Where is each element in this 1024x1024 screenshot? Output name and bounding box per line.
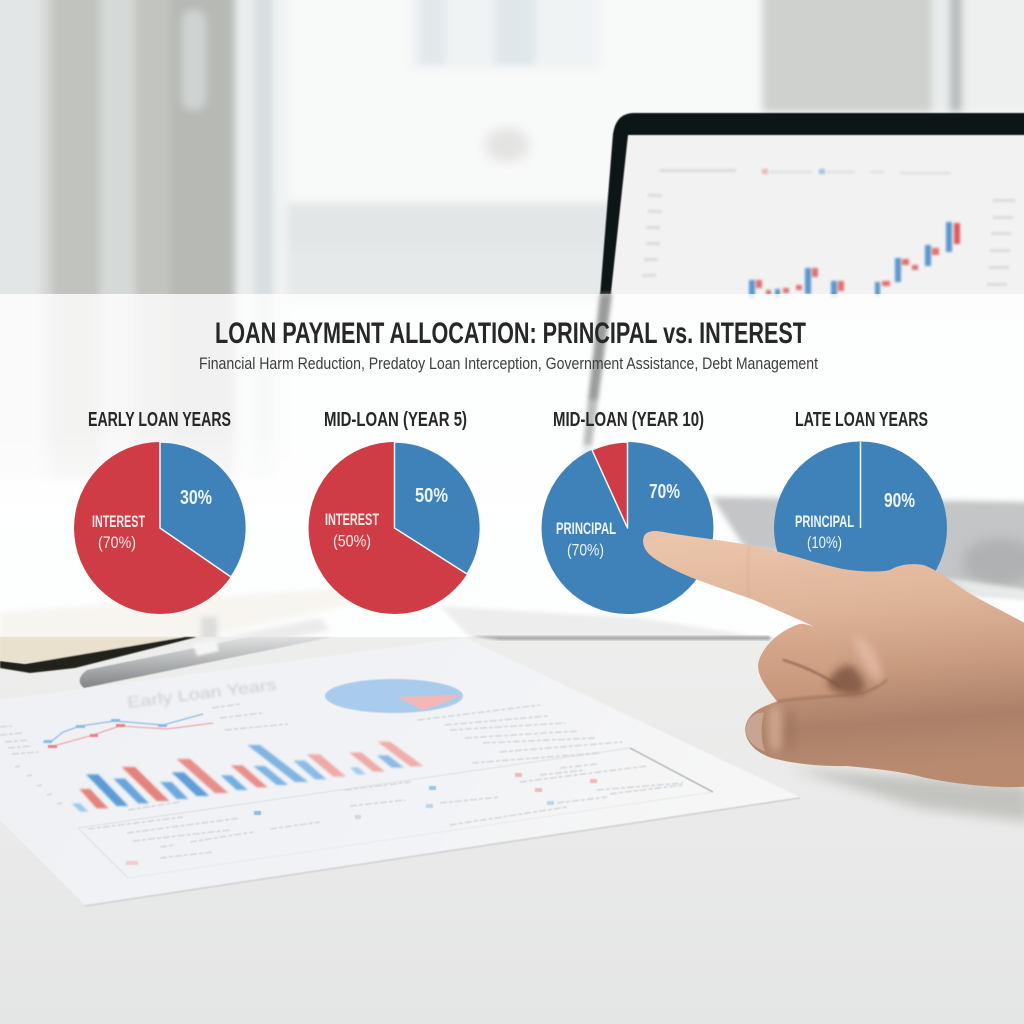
- label: principal 70%: [556, 520, 616, 560]
- desk surface: [0, 637, 1024, 1024]
- label: principal 70%: PRINCIPAL: [556, 520, 616, 538]
- thumb nail and highlight: [746, 704, 796, 752]
- pale palm edge: [853, 633, 881, 683]
- panel lower-area soft fade: [0, 430, 590, 530]
- notebook: [0, 637, 197, 673]
- photo background: [0, 0, 1024, 640]
- pie: mid-loan year 5: [308, 442, 480, 614]
- notebook behind panel: [0, 588, 350, 640]
- paper heading: Early Loan Years: [126, 677, 277, 712]
- paper bar chart: [72, 742, 423, 812]
- pie group: mid-loan year 10: [542, 409, 714, 614]
- label: principal 10%: [795, 513, 854, 552]
- paper sheet: [0, 638, 800, 905]
- label: interest 70%: INTEREST: [92, 513, 145, 531]
- heading: mid-loan year 5: MID-LOAN (YEAR 5): [324, 409, 467, 431]
- label: principal 70%: (70%): [567, 542, 604, 560]
- label: 90%: 90%: [884, 490, 915, 512]
- pie: early loan years: [74, 442, 246, 614]
- laptop base edge on desk: [470, 636, 770, 640]
- laptop screen candlestick chart: [749, 222, 960, 298]
- shadow between fingers: [827, 665, 865, 695]
- laptop keyboard seen through panel: [440, 497, 1024, 637]
- curled finger: [758, 624, 867, 702]
- laptop lid and screen: [600, 113, 1024, 296]
- label: interest 50%: [325, 511, 379, 550]
- label: interest 50%: INTEREST: [325, 511, 379, 529]
- pie: late loan years: [774, 442, 947, 614]
- laptop screen legend and axes: [642, 169, 1015, 286]
- paper small text lines: [0, 704, 683, 858]
- paper report: [0, 638, 800, 906]
- laptop bezel seen through panel: [580, 294, 612, 490]
- translucent white panel: [0, 294, 1024, 637]
- pie: mid-loan year 10: [542, 442, 714, 614]
- pointing hand: [643, 531, 1024, 787]
- paper table frame: [78, 748, 713, 878]
- label: 50%: 50%: [415, 485, 448, 507]
- laptop: [600, 113, 1024, 320]
- heading: late loan years: LATE LOAN YEARS: [795, 409, 928, 431]
- label: interest 70%: (70%): [98, 534, 136, 552]
- fingernail: [643, 531, 672, 545]
- label: principal 10%: (10%): [807, 534, 842, 552]
- label: principal 10%: PRINCIPAL: [795, 513, 854, 531]
- subtitle: Financial Harm Reduction, Predatoy Loan Interception, Government Assistance, Debt Management: [199, 354, 818, 373]
- pie group: mid-loan year 5: [308, 409, 480, 614]
- hand shape: [643, 531, 1024, 787]
- pie group: early loan years: [74, 409, 246, 614]
- heading: early loan years: EARLY LOAN YEARS: [88, 409, 231, 431]
- label: interest 50%: (50%): [333, 532, 371, 550]
- chart panel content: [74, 317, 947, 614]
- title: LOAN PAYMENT ALLOCATION: PRINCIPAL vs. INTEREST: [215, 317, 806, 350]
- paper mini pie chart: [325, 679, 463, 713]
- label: 30%: 30%: [180, 487, 212, 509]
- hand shadow on desk: [790, 768, 1024, 822]
- label: 70%: 70%: [649, 481, 680, 503]
- pen: [80, 637, 332, 688]
- heading: mid-loan year 10: MID-LOAN (YEAR 10): [553, 409, 704, 431]
- pie group: late loan years: [774, 409, 947, 614]
- label: interest 70%: [92, 513, 145, 552]
- paper lower edge shadow: [85, 798, 800, 906]
- paper line chart: [43, 714, 213, 748]
- paper legend markers: [126, 773, 597, 865]
- finger creases: [747, 547, 887, 702]
